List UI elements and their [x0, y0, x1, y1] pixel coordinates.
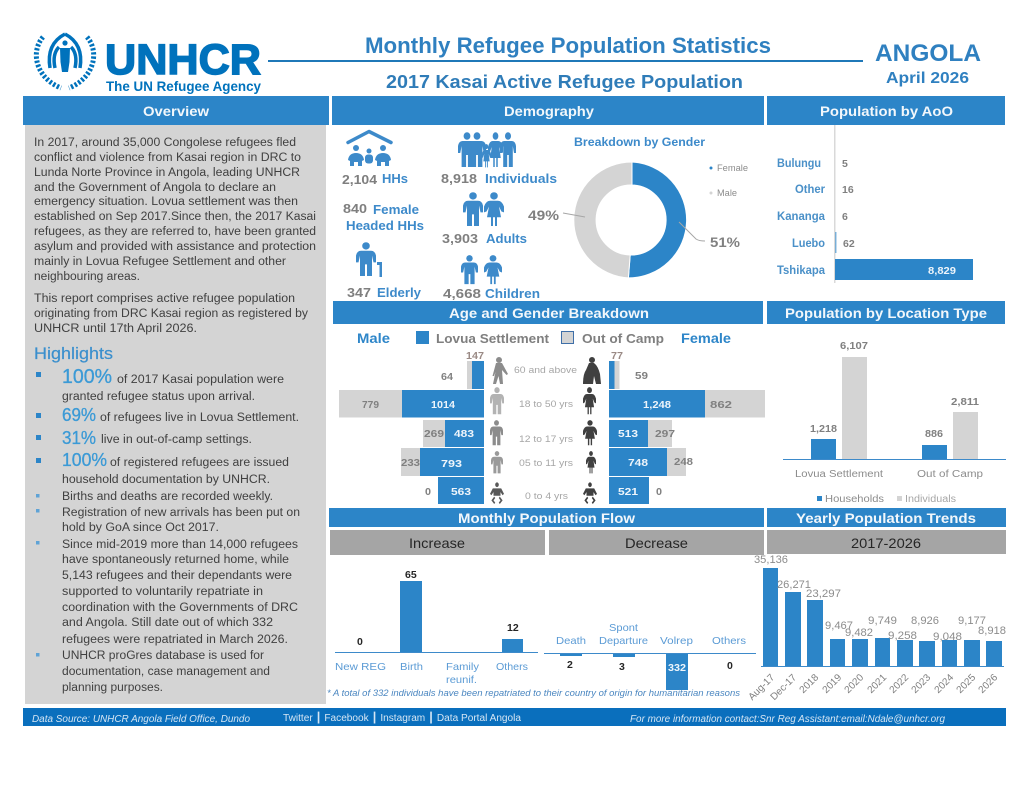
gender chart heading: Breakdown by Gender — [574, 137, 706, 149]
bar chart: yearly: 2019 — [821, 672, 844, 696]
bar chart: decrease: Death — [556, 635, 586, 647]
bar chart: yearly: 8,918 — [978, 625, 1006, 637]
bar chart: location type: Lovua Settlement — [795, 469, 883, 480]
bar chart: yearly: 2024 — [933, 672, 956, 696]
stat: households — [342, 171, 408, 187]
bar chart: location type: 1,218 — [810, 423, 837, 435]
text block: overview paragraph: In 2017, around 35,000 Congolese refugees fled — [34, 137, 296, 149]
bar chart: yearly: 26,271 — [777, 579, 811, 591]
bar chart: decrease: Departure — [599, 635, 648, 647]
panel: overview — [23, 96, 329, 704]
subheading: increase: Increase — [409, 535, 465, 551]
stat: elderly — [347, 285, 422, 300]
icon: elderly — [356, 242, 382, 277]
highlights list: 100% — [62, 366, 112, 388]
heading: population by AoO — [767, 96, 1005, 125]
panel: demography — [332, 96, 764, 301]
donut legend: Female — [717, 163, 748, 173]
logo: UNHCR emblem and wordmark — [36, 34, 261, 94]
bar chart: increase: Others — [496, 661, 528, 673]
heading: highlights: Highlights — [34, 344, 113, 363]
heading: demography: Demography — [504, 103, 594, 119]
footer — [23, 708, 1006, 726]
chart: female bars: 862 — [710, 399, 732, 411]
heading: age and gender — [333, 301, 763, 324]
text block: overview paragraph: asylum and provided with assistance and protection — [34, 241, 316, 253]
bar chart: AoO: Other — [795, 184, 826, 196]
bar chart: AoO: Tshikapa — [777, 265, 826, 277]
bar chart: AoO: 16 — [842, 184, 854, 196]
bar chart: increase: 0 — [357, 636, 363, 648]
stat: elderly: Elderly — [377, 285, 422, 300]
chart: female bars: 513 — [618, 428, 638, 440]
panel: age and gender breakdown — [333, 301, 765, 504]
social links: Twitter ┃ Facebook ┃ Instagram ┃ Data Portal Angola — [283, 711, 521, 724]
text block: overview paragraph: mainly in Lovua Refugee Settlement and other — [34, 256, 286, 268]
age labels: 05 to 11 yrs — [519, 458, 573, 469]
highlights list: live in out-of-camp settings. — [101, 434, 252, 446]
country: ANGOLA — [875, 40, 981, 67]
heading: demography — [332, 96, 764, 125]
bar chart: yearly: 9,467 — [825, 620, 853, 632]
bar chart: decrease — [544, 622, 756, 690]
subheading: decrease — [549, 530, 764, 555]
highlights list: supported to voluntarily repatriate in — [62, 586, 263, 598]
bar chart: increase: 12 — [507, 622, 519, 634]
stat: children: Children — [485, 286, 540, 301]
subheading: increase — [330, 530, 545, 555]
chart: male bars: 269 — [424, 428, 444, 440]
legend: age and gender: Out of Camp — [582, 331, 664, 346]
bar chart: yearly: 8,926 — [911, 615, 939, 627]
bar chart: yearly: 23,297 — [806, 588, 841, 600]
stat: households: HHs — [382, 171, 408, 186]
stat: children: 4,668 — [443, 286, 481, 301]
donut legend — [710, 163, 748, 198]
legend: location type — [817, 494, 956, 505]
stat: individuals — [441, 171, 557, 186]
bar chart: decrease: Volrep — [660, 635, 693, 647]
age labels: 12 to 17 yrs — [519, 434, 573, 445]
highlights list: 31% — [62, 428, 96, 448]
bar chart: decrease: 2 — [567, 659, 573, 671]
stat: female headed households: 840 — [343, 201, 367, 216]
bar chart: yearly: 35,136 — [754, 554, 788, 566]
bar chart: location type: 2,811 — [951, 396, 979, 408]
highlights list: of registered refugees are issued — [110, 457, 289, 469]
highlights list: UNHCR proGres database is used for — [62, 650, 264, 662]
text block: overview paragraph: originating from DRC Kasai region as registered by — [34, 308, 308, 320]
highlights list: coordination with the Governments of DRC — [62, 602, 298, 614]
bar chart: location type: Out of Camp — [917, 469, 983, 480]
highlights list: 100% — [62, 450, 107, 470]
stat: female headed households — [343, 201, 424, 233]
bar chart: decrease: Others — [712, 635, 746, 647]
chart: male bars: 233 — [401, 457, 420, 469]
stat: individuals: Individuals — [485, 171, 557, 186]
highlights list: Since mid-2019 more than 14,000 refugees — [62, 539, 298, 551]
text block: overview paragraph — [34, 137, 316, 335]
heading: age and gender: Age and Gender Breakdown — [449, 305, 649, 321]
stat: elderly: 347 — [347, 285, 371, 300]
bar chart: yearly: 9,048 — [933, 631, 962, 643]
donut chart: gender — [528, 162, 741, 278]
title: Monthly Refugee Population Statistics — [365, 33, 771, 58]
chart: male bars: 1014 — [431, 399, 455, 411]
highlights list: 5,143 refugees and their dependants were — [62, 570, 292, 582]
highlights list: and Angola. Still date out of which 332 — [62, 617, 273, 629]
highlights list: Registration of new arrivals has been put on — [62, 507, 300, 519]
stat: female headed households: Female — [373, 202, 419, 217]
bar chart: decrease: 332 — [668, 662, 686, 674]
stat: households: 2,104 — [342, 172, 378, 187]
highlights list: documentation, case management and — [62, 666, 270, 678]
subheading: year range — [767, 530, 1006, 554]
text block: overview paragraph: Lunda Norte Province in Angola, leading UNHCR — [34, 167, 300, 179]
bar chart: decrease: Spont — [609, 622, 638, 634]
tagline: The UN Refugee Agency — [106, 78, 261, 94]
text block: overview paragraph: This report comprises active refugee population — [34, 293, 295, 305]
icon: UNHCR emblem — [36, 34, 94, 88]
text block: overview paragraph: established on Sep 2017.Since then, the 2017 Kasai — [34, 211, 316, 223]
chart: female bars: 248 — [674, 456, 693, 468]
stat: children — [443, 286, 540, 301]
chart: male bars — [339, 350, 484, 504]
highlights list: planning purposes. — [62, 682, 163, 694]
age labels — [514, 365, 577, 502]
subheading: decrease: Decrease — [625, 535, 688, 551]
bar chart: yearly: 2020 — [843, 672, 866, 696]
bar chart: location type: 6,107 — [840, 340, 868, 352]
donut legend: Male — [717, 188, 737, 198]
bar chart: yearly: 2026 — [977, 672, 1000, 696]
text block: overview paragraph: refugees, as they are referred to, have been granted — [34, 226, 316, 238]
text block: overview paragraph: UNHCR until 17th April 2026. — [34, 323, 197, 335]
bar chart: yearly: 9,258 — [888, 630, 917, 642]
legend: location type: Individuals — [905, 494, 956, 505]
bar chart: yearly: 2018 — [798, 672, 821, 696]
chart: female bars: 1,248 — [643, 399, 671, 411]
donut chart: gender: 51% — [710, 234, 741, 250]
bar chart: decrease: 3 — [619, 661, 625, 673]
text block: overview paragraph: emergency situation. Lovua settlement was then — [34, 196, 298, 208]
bar chart: yearly: Aug-17 — [747, 672, 777, 703]
stat: adults: 3,903 — [442, 231, 478, 246]
chart: male bars: 779 — [362, 399, 379, 411]
bar chart: yearly: 9,177 — [958, 615, 986, 627]
bar chart: increase — [335, 569, 538, 686]
bar chart: increase: New REG — [335, 661, 386, 673]
highlights list: Births and deaths are recorded weekly. — [62, 491, 273, 503]
wordmark: UNHCR — [105, 36, 261, 84]
bar chart: increase: 65 — [405, 569, 417, 581]
bar chart: increase: reunif. — [446, 674, 477, 686]
heading: population by AoO: Population by AoO — [820, 103, 953, 119]
icon: adults — [463, 192, 504, 226]
bar chart: yearly: 2023 — [910, 672, 933, 696]
heading: monthly flow — [329, 508, 764, 527]
highlights list: granted refugee status upon arrival. — [62, 391, 255, 403]
bar chart: decrease: 0 — [727, 660, 733, 672]
heading: yearly trends — [767, 508, 1006, 527]
contact: For more information contact:Snr Reg Assistant:email:Ndale@unhcr.org — [630, 714, 945, 725]
icon: household — [348, 132, 391, 166]
icon: individuals — [458, 132, 516, 167]
bar chart: yearly: Dec-17 — [769, 672, 799, 703]
chart: male bars: 483 — [454, 428, 474, 440]
legend: location type: Households — [825, 494, 884, 505]
highlights list: of refugees live in Lovua Settlement. — [100, 412, 299, 424]
bar chart: location type: 886 — [925, 428, 943, 440]
highlights list: hold by GoA since Oct 2017. — [62, 522, 219, 534]
chart: female bars: 77 — [611, 350, 623, 362]
icons: male age groups — [490, 357, 508, 504]
bar chart: yearly: 2025 — [955, 672, 978, 696]
heading: overview: Overview — [143, 103, 209, 119]
chart: male bars: 563 — [451, 486, 471, 498]
text block: overview paragraph: neighbouring areas. — [34, 271, 140, 283]
chart: female bars: 521 — [618, 486, 638, 498]
highlights list: 69% — [62, 405, 96, 425]
text block: overview paragraph: and the Government of Angola to declare an — [34, 182, 276, 194]
bar chart: location type — [783, 340, 1006, 480]
chart: male bars: 147 — [466, 350, 484, 362]
chart: male bars: 64 — [441, 371, 453, 383]
legend: age and gender: Lovua Settlement — [436, 331, 550, 346]
bar chart: yearly — [747, 554, 1006, 703]
highlights list: household documentation by UNHCR. — [62, 474, 270, 486]
panel: population by AoO — [767, 96, 1005, 283]
highlights list: have spontaneously returned home, while — [62, 554, 289, 566]
legend: age and gender — [357, 330, 731, 346]
age labels: 18 to 50 yrs — [519, 399, 573, 410]
stat: adults — [442, 231, 527, 246]
bar chart: yearly: 2021 — [866, 672, 889, 696]
heading: monthly flow: Monthly Population Flow — [458, 510, 635, 526]
overview background — [25, 125, 326, 704]
chart: female bars: 0 — [656, 486, 662, 498]
chart: female bars: 59 — [635, 370, 648, 382]
icons: female age groups — [583, 357, 601, 504]
stat: individuals: 8,918 — [441, 171, 477, 186]
chart: male bars: 0 — [425, 486, 431, 498]
bar chart: AoO: 8,829 — [928, 265, 956, 277]
legend: age and gender: Male — [357, 330, 390, 346]
bar chart: increase: Birth — [400, 661, 423, 673]
bar chart: AoO: Luebo — [792, 238, 825, 250]
footnote: * A total of 332 individuals have been repatriated to their country of origin for humanitarian reasons — [327, 688, 740, 699]
chart: female bars: 748 — [628, 457, 648, 469]
panel: population by location type — [767, 301, 1006, 505]
bar chart: increase: Family — [446, 661, 480, 673]
legend: age and gender: Female — [681, 330, 731, 346]
age labels: 0 to 4 yrs — [525, 491, 568, 502]
bar chart: yearly: 9,482 — [845, 627, 873, 639]
data source: Data Source: UNHCR Angola Field Office, Dundo — [32, 714, 250, 725]
panel: monthly population flow — [327, 508, 764, 699]
age labels: 60 and above — [514, 365, 577, 376]
subtitle: 2017 Kasai Active Refugee Population — [386, 71, 743, 92]
bar chart: AoO: Bulungu — [777, 158, 821, 170]
text block: overview paragraph: conflict and violence from Kasai region in DRC to — [34, 152, 301, 164]
highlights list — [36, 366, 300, 694]
panel: yearly population trends — [747, 508, 1006, 703]
heading: location type: Population by Location Type — [785, 305, 987, 321]
bar chart: yearly: 9,749 — [868, 615, 897, 627]
heading: location type — [767, 301, 1005, 324]
icon: children — [461, 255, 502, 284]
highlights list: of 2017 Kasai population were — [117, 374, 284, 386]
chart: male bars: 793 — [441, 458, 462, 470]
chart: female bars — [609, 350, 765, 504]
stat: adults: Adults — [486, 231, 527, 246]
bar chart: AoO: 6 — [842, 211, 848, 223]
stat: female headed households: Headed HHs — [346, 218, 424, 233]
bar chart: AoO: 5 — [842, 158, 848, 170]
bar chart: AoO: Kananga — [777, 211, 826, 223]
subheading: year range: 2017-2026 — [851, 535, 921, 551]
heading: overview — [23, 96, 329, 125]
highlights list: refugees were repatriated in March 2026. — [62, 634, 288, 646]
bar chart: AoO — [777, 125, 973, 283]
bar chart: yearly: 2022 — [888, 672, 911, 696]
chart: female bars: 297 — [655, 428, 675, 440]
donut chart: gender: 49% — [528, 207, 560, 223]
date: April 2026 — [886, 70, 969, 87]
bar chart: AoO: 62 — [843, 238, 855, 250]
heading: yearly trends: Yearly Population Trends — [796, 510, 976, 526]
